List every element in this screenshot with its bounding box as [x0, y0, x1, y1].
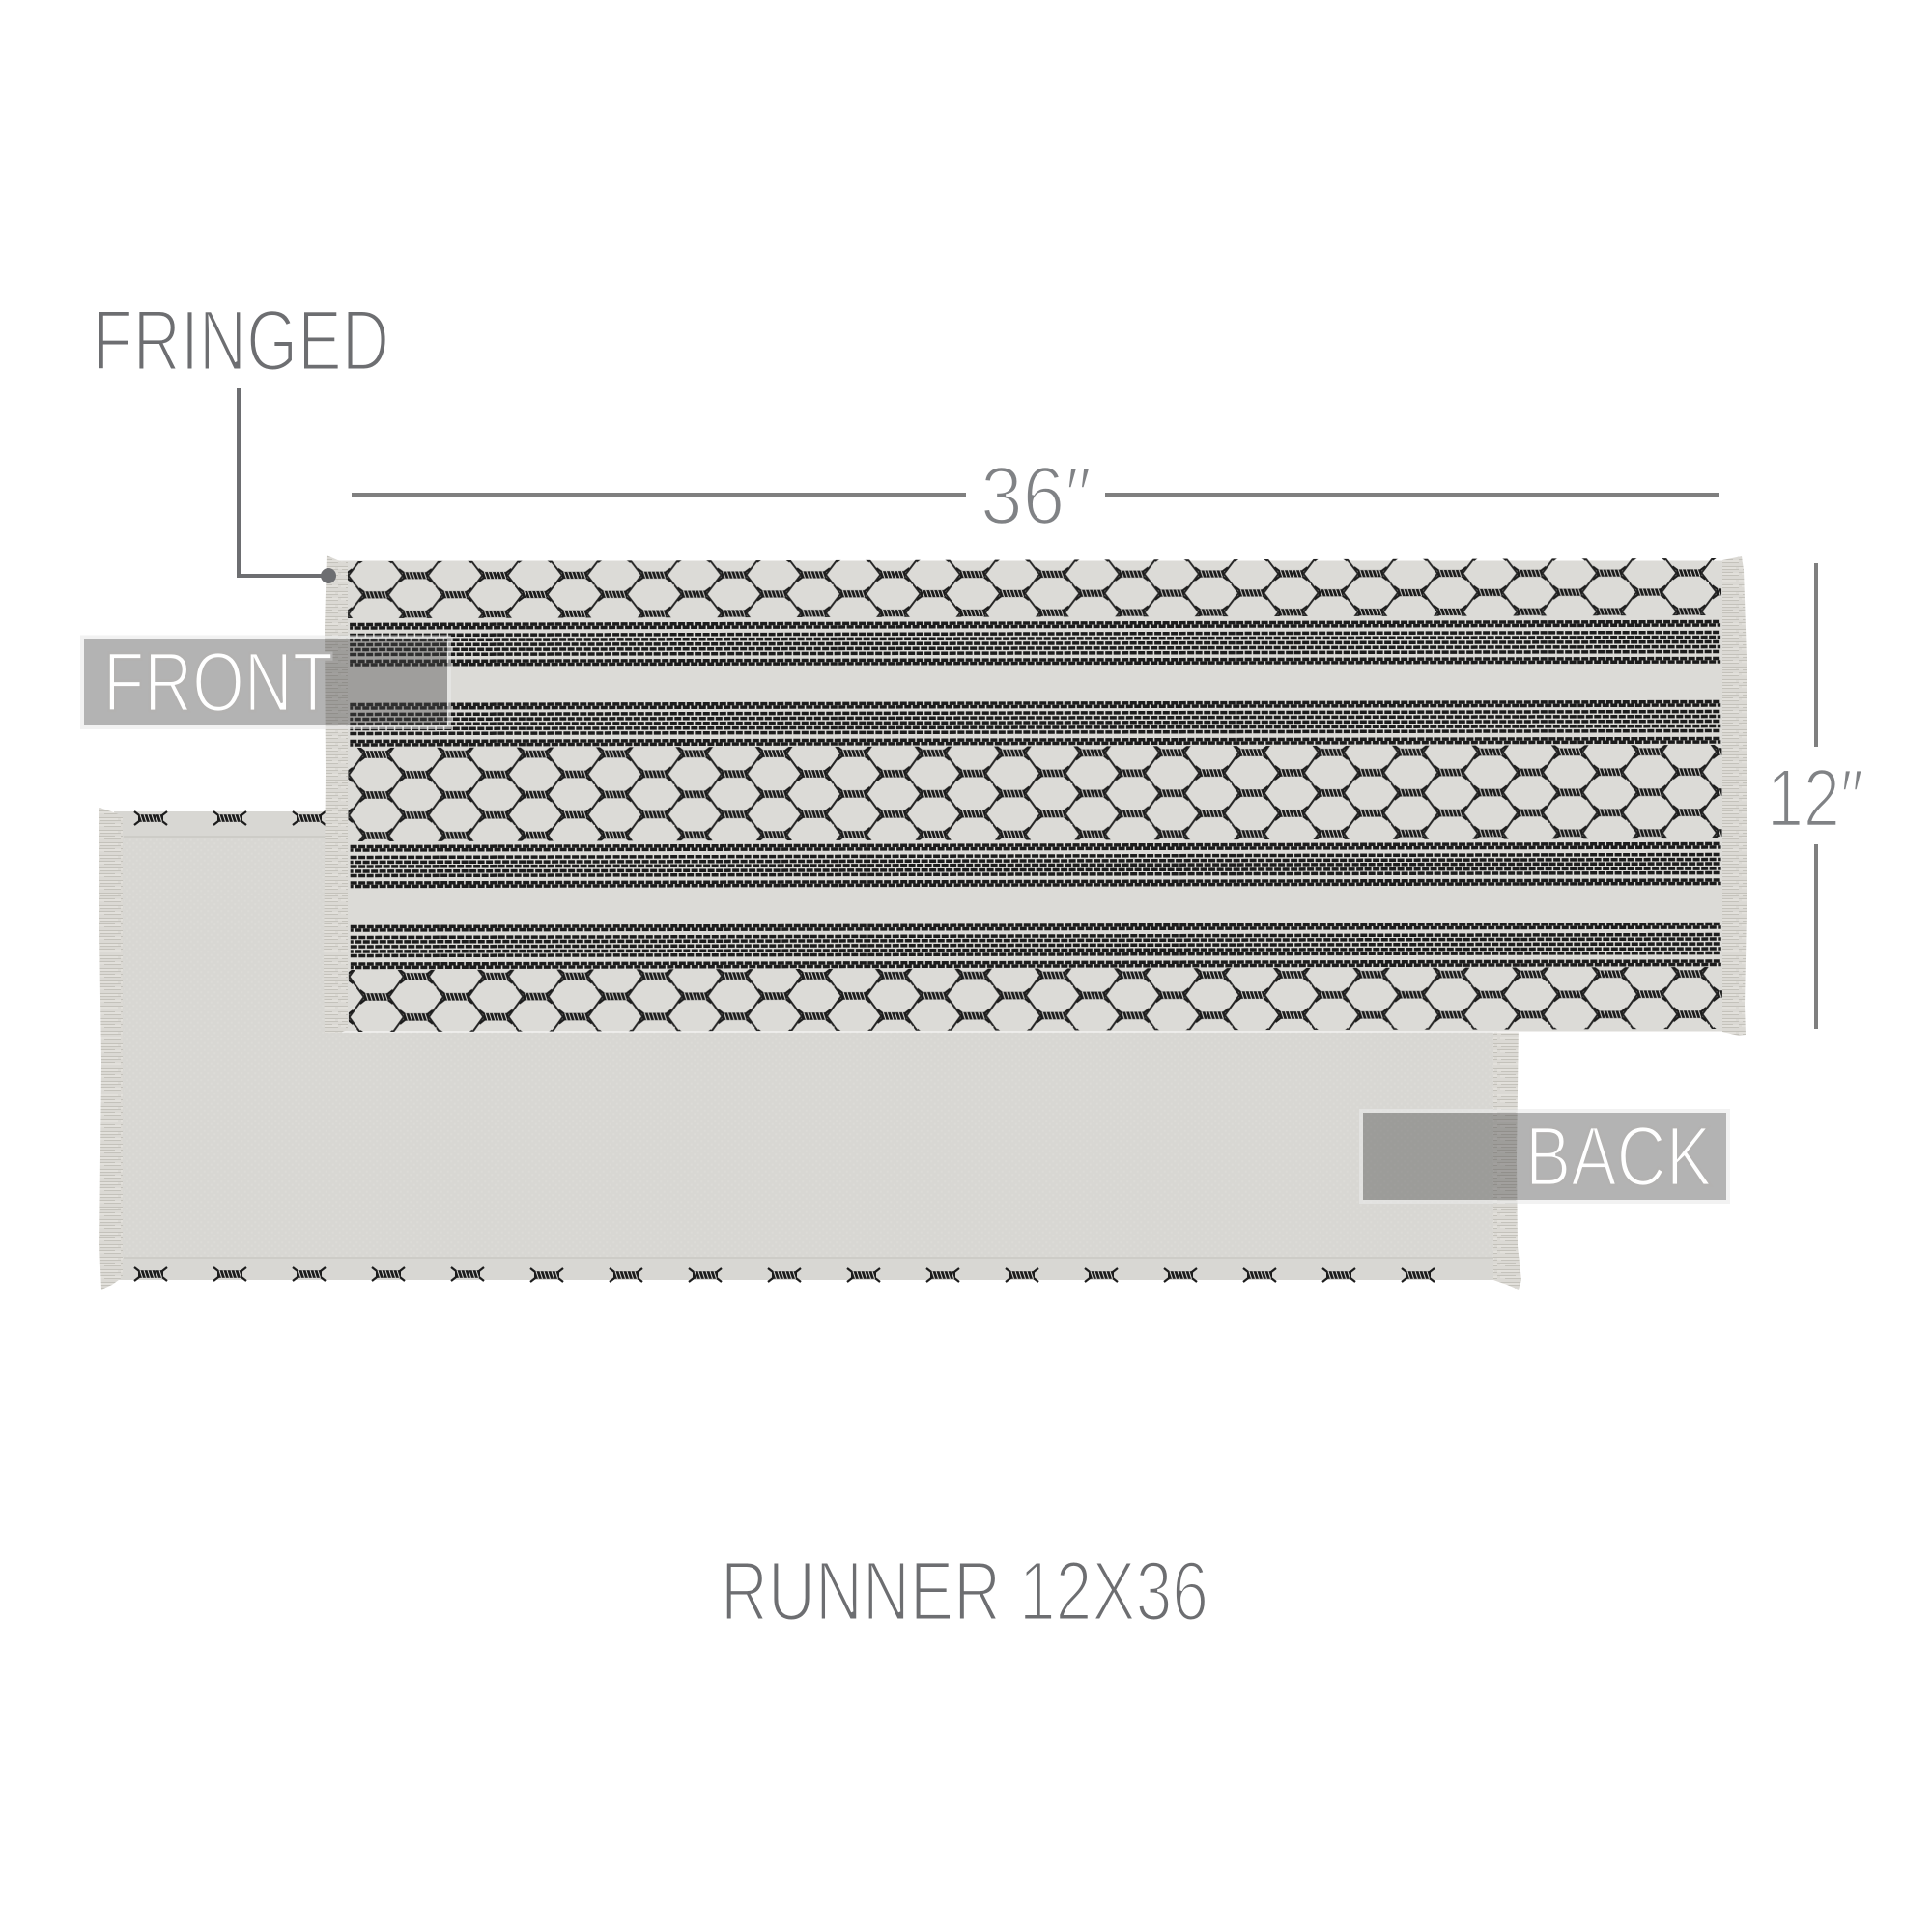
height dimension: [1767, 563, 1863, 1029]
back runner: [99, 808, 1521, 1290]
stripe group 3: [351, 844, 1721, 886]
stripe group 1: [350, 622, 1720, 665]
back weave texture: [124, 837, 1495, 1258]
back label: [1361, 1110, 1728, 1204]
front pattern: [348, 558, 1722, 1032]
stripe group 2: [350, 702, 1720, 745]
front left fringe: [324, 555, 348, 1033]
fringed label: FRINGED: [93, 292, 389, 388]
back left fringe: [99, 808, 123, 1290]
width line right: [1105, 493, 1719, 497]
height line bottom: [1814, 844, 1818, 1029]
back runner cloth: [114, 811, 1507, 1280]
back right fringe: [1493, 1024, 1521, 1290]
top chicken wire band: [348, 558, 1721, 618]
fringed callout: [93, 292, 389, 583]
width line left: [352, 493, 966, 497]
height line top: [1814, 563, 1818, 747]
bottom chicken wire band: [349, 967, 1722, 1032]
width value: 36″: [980, 450, 1092, 541]
back label box: [1363, 1113, 1726, 1200]
back label border: [1361, 1111, 1728, 1202]
front label: [82, 636, 449, 729]
front runner: [324, 555, 1747, 1036]
width dimension: [352, 450, 1719, 541]
front right fringe: [1722, 556, 1747, 1036]
front label text: FRONT: [103, 636, 333, 729]
back label text: BACK: [1525, 1110, 1712, 1204]
middle chicken wire band: [348, 745, 1722, 841]
front cloth: [338, 560, 1725, 1032]
back top rope marks: [134, 811, 326, 825]
leader line: [239, 388, 328, 576]
back hem seams: [124, 837, 1493, 1258]
product caption: RUNNER 12X36: [721, 1545, 1208, 1638]
height value: 12″: [1767, 753, 1863, 843]
back bottom rope marks: [134, 1267, 1435, 1282]
front label border: [82, 638, 449, 727]
front label box: [84, 639, 447, 725]
leader dot: [321, 568, 336, 583]
stripe group 4: [351, 924, 1721, 967]
